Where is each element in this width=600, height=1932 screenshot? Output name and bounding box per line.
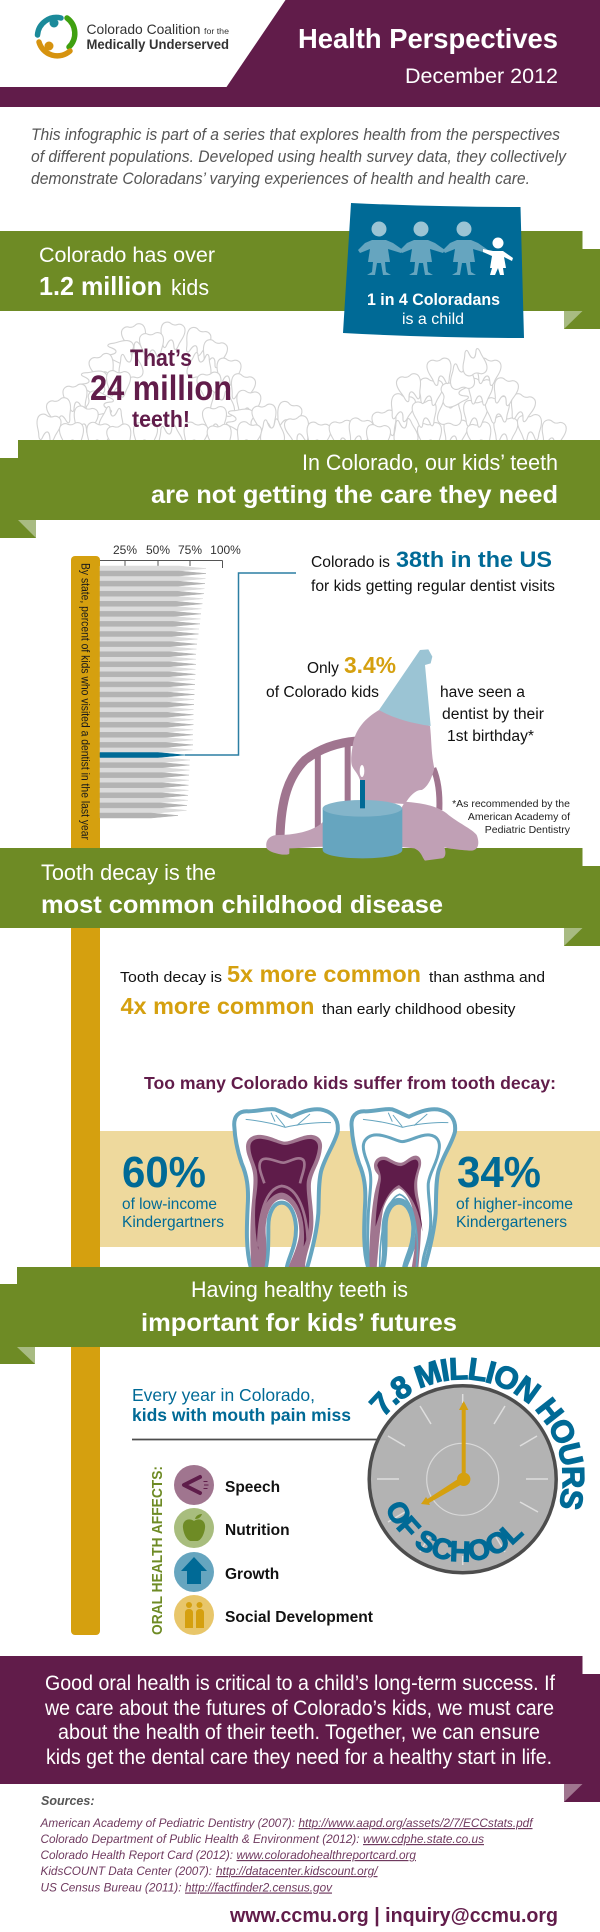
intro text: This infographic is part of a series that explores health from the perspectives [31,126,560,144]
logo [38,17,230,56]
intro text: demonstrate Coloradans’ varying experiences of health and health care. [31,170,530,188]
callout: 24 million teeth [90,345,232,432]
logo: for the [204,27,230,36]
stat: 3.4 percent: have seen a [440,684,525,701]
chart axis: 50% [146,543,170,557]
icon: people [174,1595,214,1635]
icon: speech [174,1465,214,1505]
panel: Colorado map, 1 in 4: 1 in 4 Coloradans [367,291,500,309]
stat: 3.4 percent: 3.4% [344,652,396,678]
text: 5x and 4x more common: than early childhood obesity [322,1001,516,1018]
title: Health Perspectives [298,23,558,54]
logo: Medically Underserved [86,36,229,52]
labels: Social Development [225,1609,373,1626]
sources: KidsCOUNT Data Center (2007): [40,1864,212,1878]
title: December 2012 [405,64,558,88]
sources: US Census Bureau (2011): [40,1880,182,1894]
sources: www.cdphe.state.co.us [363,1832,484,1846]
stat: 60 percent: of low-income [122,1196,217,1213]
banner: closing statement: Good oral health is critical to a child’s long-term success. If [45,1672,555,1695]
stat: 60 percent [122,1148,224,1231]
banner: care they need: are not getting the care they need [151,481,558,509]
icon: children holding hands [358,222,513,275]
sources: Sources: [41,1794,94,1808]
dark bars [100,571,206,818]
stat: 3.4 percent: 1st birthday* [447,728,534,745]
text: every year in Colorado: Every year in Colorado, [132,1385,315,1405]
labels [225,1479,373,1626]
logo mark [38,17,75,56]
stat: 38th in the US: Colorado is [311,554,390,571]
bar chart: dentist visits by state [78,543,241,840]
text: every year in Colorado [132,1385,351,1425]
stat: 3.4 percent: of Colorado kids [266,684,379,701]
sources: Colorado Health Report Card (2012): [40,1848,233,1862]
stat: 34 percent: Kindergarteners [456,1214,567,1231]
banner: care they need: In Colorado, our kids’ teeth [302,450,558,475]
banner: kids' futures: Having healthy teeth is [191,1277,408,1302]
text: 5x and 4x more common: Tooth decay is [120,969,222,986]
sources [40,1794,534,1894]
text: 5x and 4x more common: than asthma and [429,969,545,986]
heading: tooth decay: Too many Colorado kids suffer from tooth decay: [144,1073,556,1093]
sources: http://factfinder2.census.gov [185,1880,333,1894]
banner: kids' futures [0,1267,600,1364]
stat: 34 percent: 34% [457,1148,541,1197]
logo: Colorado Coalition [86,21,200,37]
banner: most common childhood disease: Tooth decay is the [41,860,216,885]
stat: 38th in the US: for kids getting regular dentist visits [311,578,555,595]
footnote: *As recommended by the [452,798,570,810]
stat: 34 percent: of higher-income [456,1196,573,1213]
banner: closing statement: we care about the futures of Colorado’s kids, we must care [44,1697,554,1720]
text: 5x and 4x more common: 5x more common [227,961,421,987]
callout: 24 million teeth: 24 million [90,369,232,408]
Colorado bar [100,752,185,758]
intro text: of different populations. Developed using health survey data, they collectively [31,148,568,166]
curved text: of school: OF SCHOOL [388,1502,524,1562]
text: 5x and 4x more common [120,961,545,1019]
footnote [452,798,571,836]
stat: 3.4 percent: Only [307,660,339,677]
footnote: American Academy of [468,811,570,823]
banner: most common childhood disease [0,848,600,946]
banner: most common childhood disease: most common childhood disease [41,891,443,919]
banner: 1.2 million kids [0,231,600,329]
gold timeline bar [71,556,100,1635]
stat: 60 percent: 60% [122,1148,206,1197]
sources: American Academy of Pediatric Dentistry (2007): [40,1816,295,1830]
banner: closing statement: kids get the dental care they need for a healthy start in life. [46,1746,552,1769]
stat: 3.4 percent [266,652,544,745]
light bars [100,566,206,813]
text: every year in Colorado: kids with mouth pain miss [132,1405,351,1425]
labels: Speech [225,1479,280,1496]
title [298,23,558,88]
sources: Colorado Department of Public Health & Environment (2012): [40,1832,360,1846]
contact line: www.ccmu.org | inquiry@ccmu.org [229,1904,558,1927]
banner: closing statement [0,1656,600,1802]
banner: care they need [0,440,600,538]
chart axis [100,543,241,568]
callout connector line [185,573,296,755]
sources: http://datacenter.kidscount.org/ [216,1864,379,1878]
callout: 24 million teeth: That’s [130,345,192,372]
text: 5x and 4x more common: 4x more common [120,993,314,1019]
stat: 38th in the US: 38th in the US [396,547,552,572]
panel: Colorado map, 1 in 4: is a child [402,311,464,328]
header band [0,0,600,107]
banner: closing statement: about the health of their teeth. Together, we can ensure [58,1721,540,1744]
chart axis: 75% [178,543,202,557]
baby [266,710,478,861]
sources: http://www.aapd.org/assets/2/7/ECCstats.pdf [298,1816,534,1830]
labels: Growth [225,1566,279,1583]
chart axis: 100% [210,543,241,557]
clock [367,1357,585,1574]
chair [280,741,439,837]
banner: 1.2 million kids: 1.2 million [39,271,162,301]
tooth piles [34,321,567,453]
list: oral health affects [150,1465,373,1635]
chart axis: 25% [113,543,137,557]
chart caption: By state, percent of kids who visited a dentist in the last year [78,563,92,840]
curved text: 7.8 million hours: 7.8 MILLION HOURS [368,1357,585,1510]
cake [323,765,402,858]
party hat [379,649,432,726]
banner: 1.2 million kids: kids [171,275,209,300]
icon: growth arrow [174,1552,214,1592]
intro text [31,126,568,188]
panel: Colorado map, 1 in 4 [343,203,524,338]
stat: 38th in the US [311,547,555,595]
callout: 24 million teeth: teeth! [132,406,190,432]
stat: 34 percent [456,1148,573,1231]
vertical label: ORAL HEALTH AFFECTS: [150,1466,166,1635]
banner: 1.2 million kids: Colorado has over [39,243,215,267]
divider to clock [132,1438,378,1440]
stat: 3.4 percent: dentist by their [442,706,544,723]
labels: Nutrition [225,1522,290,1539]
illustration: baby with birthday cake [266,649,478,861]
banner: kids' futures: important for kids’ futures [141,1309,457,1337]
icon: tooth 34 percent [352,1109,455,1268]
clock hands [421,1401,470,1505]
footnote: Pediatric Dentistry [485,824,571,836]
icon: tooth 60 percent [234,1109,338,1268]
tan band [100,1131,600,1247]
stat: 60 percent: Kindergartners [122,1214,224,1231]
icon: apple [174,1508,214,1548]
sources: www.coloradohealthreportcard.org [236,1848,416,1862]
